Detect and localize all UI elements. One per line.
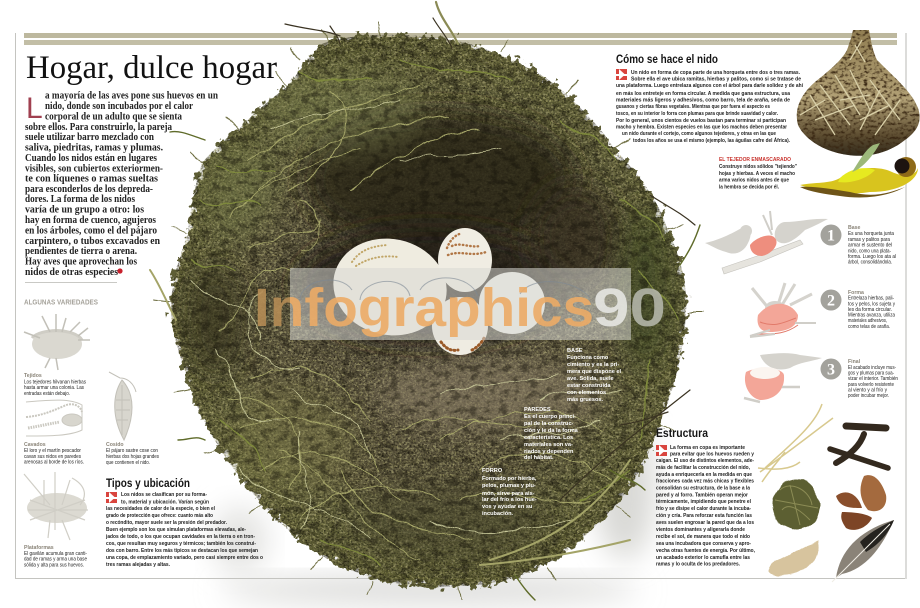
- variety: cosido: hierbas dos hojas grandes: [106, 454, 159, 460]
- section: como se hace el nido: todos los años se usa el mismo (ejemplo, las águilas cafre del África).: [633, 137, 790, 144]
- section: como se hace el nido: [616, 54, 803, 144]
- variety: tejidos: Tejidos: [24, 373, 42, 379]
- variety: cavados: Cavados: [24, 442, 46, 448]
- variety: plataformas: sólida y alta para sus huevos.: [24, 562, 84, 568]
- nest label: forro: pelos, plumas y plu-: [482, 483, 536, 489]
- eggs: [324, 228, 545, 355]
- callout: el tejedor enmascarado: hojas y hierbas. A veces el macho: [719, 171, 795, 177]
- section: tipos y ubicacion: una copa, de emplazamiento variado, pero casi siempre entre dos o: [106, 555, 263, 561]
- section: como se hace el nido: Un nido en forma de copa parte de una horqueta entre dos o tres ramas.: [631, 70, 800, 76]
- intro text: suele utilizar barro mezclado con: [25, 132, 154, 143]
- nest label: forro: món, sirve para ais-: [482, 491, 535, 497]
- step 1: ramas y palitos para: [848, 237, 890, 243]
- step 3: vizar el interior. También: [848, 376, 898, 382]
- step 2: Forma: [848, 290, 864, 296]
- nest label: base: [567, 348, 622, 403]
- materials: feather: [832, 520, 894, 582]
- section: tipos y ubicacion: grado de protección que ofrece: cuanto más alto: [106, 513, 213, 519]
- step 3: El acabado incluye mus-: [848, 365, 896, 371]
- section: estructura: aves suelen engrosar la pared que da a los: [656, 520, 754, 526]
- nest label: paredes: Es el cuerpo princi-: [524, 414, 576, 420]
- sticks beyond the rim: [150, 2, 700, 600]
- callout: el tejedor enmascarado: EL TEJEDOR ENMASCARADO: [719, 157, 792, 163]
- step 1: Base: [848, 225, 861, 231]
- nest body: [171, 35, 686, 587]
- materials: oak leaves: [836, 475, 886, 530]
- nest label: paredes: característica. Los: [524, 435, 573, 441]
- section: estructura: térmicamente, impidiendo que penetre el: [656, 499, 751, 505]
- section: estructura: ción y cría. Para reforzar esta función las: [656, 513, 752, 519]
- intro text: nidos de otras especies: [25, 267, 118, 278]
- number badge: [820, 290, 842, 310]
- variety: cavados: arenosas al borde de los ríos.: [24, 460, 84, 466]
- variety: cavados: cavan sus nidos en paredes: [24, 454, 81, 460]
- woven nest photo: [790, 25, 920, 197]
- step 2: materiales adhesivos,: [848, 318, 887, 324]
- nest label: base: más gruesos.: [567, 397, 604, 403]
- variety: tejidos: hasta armar una colonia. Las: [24, 385, 84, 391]
- section: estructura: Estructura: [656, 428, 709, 440]
- section: como se hace el nido: tosco, en su interior lo forra con plumas para que brinde suavidad y calor.: [616, 111, 778, 117]
- nest label: base: Funciona como: [567, 355, 609, 361]
- callout: el tejedor enmascarado: [719, 157, 797, 190]
- nest label: paredes: ción y le da la forma: [524, 428, 579, 434]
- section: estructura: ramas y lo oculta de los predadores.: [656, 562, 740, 568]
- number badge: 3: [827, 362, 835, 378]
- section: estructura: ayuda a enriquecerla en la medida en que: [656, 472, 752, 478]
- number badge: [820, 358, 842, 380]
- section: tipos y ubicacion: las necesidades de calor de la especie, o bien el: [106, 506, 215, 512]
- variety: tejidos: [24, 314, 90, 397]
- section: estructura: más de facilitar la construcción del nido,: [656, 465, 750, 471]
- section: como se hace el nido: una plataforma. Luego entrelaza algunos con el árbol para darle solidez y de ahí: [616, 83, 803, 89]
- number badge: 2: [827, 292, 835, 310]
- section: estructura: [656, 428, 755, 568]
- intro text: saliva, piedritas, ramas y plumas.: [25, 142, 163, 154]
- step 2: les da forma circular.: [848, 307, 892, 313]
- section: estructura: La forma en copa es importante: [670, 445, 745, 451]
- variedades heading: ALGUNAS VARIEDADES: [24, 300, 98, 306]
- intro text: dores. La forma de los nidos: [25, 194, 135, 205]
- materials: moss: [773, 479, 819, 531]
- section: como se hace el nido: macho y hembra. Existen especies en las que los machos deben presentar: [616, 124, 788, 130]
- section: como se hace el nido: materiales más ligeros y adhesivos, como barro, tela de araña, seda de: [616, 98, 790, 104]
- variety: cavados: [24, 400, 84, 466]
- materials: wool tuft: [768, 540, 819, 577]
- end mark: [117, 268, 123, 274]
- icon: woven colony: [24, 314, 90, 370]
- intro text: [25, 90, 218, 278]
- large egg: [324, 228, 456, 346]
- variety: plataformas: dad de ramas y arma una base: [24, 556, 87, 562]
- intro text: te con líquenes o ramas sueltas: [25, 174, 158, 184]
- section: estructura: consolidan su estructura, de la base a la: [656, 486, 751, 492]
- section: tipos y ubicacion: Buen ejemplo son los que simulan plataformas elevadas, ale-: [106, 527, 246, 533]
- nest label: paredes: PAREDES: [524, 407, 551, 413]
- section: como se hace el nido: Sobre ella el ave ubica ramitas, hierbas y palitos, como si se tratase de: [631, 76, 801, 82]
- strands: [156, 22, 702, 600]
- nest label: base: cimiento y es la pri-: [567, 362, 619, 368]
- section: tipos y ubicacion: Los nidos se clasifican por su forma-: [121, 492, 207, 498]
- intro text: en los árboles, como el del pájaro: [25, 226, 157, 236]
- section: estructura: vecha otras fuentes de energía. Por último,: [656, 548, 755, 554]
- section: estructura: fracciones cada vez más chicas y flexibles: [656, 478, 754, 484]
- upper small egg: [438, 228, 492, 292]
- section: como se hace el nido: un nido durante el cortejo, como algunos tejedores, y otras en las que: [622, 131, 776, 137]
- nest label: forro: [482, 468, 537, 517]
- intro text: nido, donde son incubados por el calor: [45, 101, 193, 112]
- section: tipos y ubicacion: cos, que resultan muy seguros y térmicos; también los construi-: [106, 541, 256, 547]
- variety: plataformas: Plataformas: [24, 545, 54, 551]
- section: estructura: un acabado exterior lo camufla entre las: [656, 555, 750, 561]
- header double rule: [24, 33, 897, 45]
- intro text: Hay aves que aprovechan los: [25, 256, 137, 268]
- section: estructura: para evitar que los huevos rueden y: [670, 452, 755, 458]
- step 3: Final: [848, 359, 861, 365]
- variety: plataformas: [24, 472, 88, 568]
- section: estructura: caigan. El uso de distintos elementos, ade-: [656, 458, 754, 464]
- intro text: visibles, son cubiertos exteriormen-: [25, 164, 163, 174]
- illustration: birds with first strands: [705, 211, 828, 274]
- variety: cavados: El loro y el martín pescador: [24, 448, 81, 454]
- nest label: base: con elementos: [567, 390, 606, 396]
- section: tipos y ubicacion: dos con barro. Entre los más típicos se destacan los que semejan: [106, 548, 258, 554]
- step 2: como telas de araña.: [848, 324, 890, 330]
- title: Hogar, dulce hogar: [26, 50, 277, 86]
- nest label: base: BASE: [567, 348, 583, 354]
- drop cap: L: [26, 92, 43, 125]
- nest label: base: estar construida: [567, 383, 611, 389]
- step 1: armar el sustento del: [848, 242, 892, 248]
- nest label: forro: incubación.: [482, 511, 514, 517]
- callout: el tejedor enmascarado: arma varios nidos antes de que: [719, 178, 789, 184]
- contrast texture: [171, 34, 686, 587]
- nest label: paredes: del hábitat.: [524, 455, 554, 461]
- section: estructura: pared y al forro. También operan mejor: [656, 492, 749, 498]
- nest label: paredes: materiales son va-: [524, 442, 573, 448]
- section: como se hace el nido: gusanos y ciertas fibras vegetales. Mientras que por fuera el aspecto es: [616, 104, 770, 110]
- watermark: [254, 268, 666, 340]
- icon: burrow: [26, 400, 82, 436]
- number badge: 1: [827, 228, 835, 244]
- icon: red arrow marker: [616, 69, 627, 80]
- nest label: forro: Formado por hierba,: [482, 476, 537, 482]
- intro text: hay en forma de cuenco, agujeros: [25, 215, 156, 226]
- intro text: sobre ellos. Para construirlo, la pareja: [25, 122, 173, 133]
- icon: sewn leaves: [109, 372, 136, 440]
- variety: cosido: El pájaro sastre cose con: [106, 448, 158, 454]
- illustration: bird weaving circular form: [750, 283, 816, 337]
- intro text: a mayoría de las aves pone sus huevos en un: [45, 90, 218, 102]
- callout: el tejedor enmascarado: la hembra se decida por él.: [719, 184, 779, 190]
- front small egg: [432, 297, 488, 355]
- step 3: [744, 353, 898, 402]
- step 1: forma. Luego los ata al: [848, 254, 896, 260]
- icon: red arrow marker: [656, 445, 667, 456]
- nest tonal areas: [305, 110, 575, 250]
- materials: straw: [758, 404, 833, 482]
- section: estructura: sea una incubadora que conserva y apro-: [656, 541, 751, 547]
- watermark: Infographics: [254, 278, 594, 338]
- nest label: forro: lar del frío a los hue-: [482, 497, 537, 503]
- nest label: forro: FORRO: [482, 468, 503, 474]
- step 2: Mientras avanza, utiliza: [848, 312, 895, 318]
- variety: cosido: Cosido: [106, 442, 124, 448]
- number badge: [820, 224, 842, 246]
- section: estructura: frío y se disipe el calor durante la incuba-: [656, 506, 751, 512]
- step 2: tos y pelos, los sujeta y: [848, 302, 895, 308]
- step 2: Entrelaza hierbas, pali-: [848, 296, 894, 302]
- texture: [171, 34, 686, 587]
- section: tipos y ubicacion: o recóndito, mayor suele ser la presión del predador.: [106, 520, 227, 526]
- nest label: paredes: pal de la construc-: [524, 421, 574, 427]
- step 3: para volverlo resistente: [848, 382, 894, 388]
- section: estructura: vientos dominantes y aligerarla donde: [656, 527, 745, 533]
- nest photograph: [150, 2, 710, 608]
- illustration: finished cup with bird: [744, 353, 822, 402]
- intro text: Cuando los nidos están en lugares: [25, 153, 157, 164]
- icon: red arrow marker: [106, 492, 117, 503]
- step 1: [705, 211, 896, 274]
- step 1: Es una horqueta junta: [848, 231, 894, 237]
- variety: cosido: que contienen el nido.: [106, 460, 150, 466]
- step 3: poder incubar mejor.: [848, 393, 889, 399]
- intro text: para esconderlos de los depreda-: [25, 184, 153, 195]
- intro text: carpintero, o tubos excavados en: [25, 236, 160, 247]
- variety: cosido: [106, 372, 159, 466]
- step 3: gos y plumas para sua-: [848, 370, 894, 376]
- icon: stick platform: [24, 472, 88, 540]
- section: como se hace el nido: en más los entreteje en forma circular. A medida que gana estructura, usa: [616, 91, 791, 97]
- intro text: pendientes de tierra o arena.: [25, 246, 137, 257]
- nest label: forro: vos y ayudar en su: [482, 504, 533, 510]
- materials: bark twigs: [830, 426, 888, 468]
- icon: masked weaver bird: [800, 143, 918, 197]
- watermark: 90: [593, 278, 666, 338]
- section: tipos y ubicacion: jados de todo, o los que ocupan cavidades en la tierra o en tron-: [105, 534, 255, 540]
- step 2: [750, 283, 895, 337]
- variety: tejidos: entradas están debajo.: [24, 391, 70, 397]
- nest label: paredes: [524, 407, 579, 461]
- variety: plataformas: El gavilán acumula gran canti-: [24, 551, 87, 557]
- step 1: nido, como una plata-: [848, 248, 891, 254]
- callout: el tejedor enmascarado: Construye nidos sólidos "tejiendo": [719, 164, 797, 170]
- nest label: paredes: riados y dependen: [524, 449, 574, 455]
- section: como se hace el nido: Cómo se hace el nido: [616, 54, 718, 66]
- step 3: al viento y al frío y: [848, 388, 887, 394]
- variety: tejidos: Los tejedores hilvanan hierbas: [24, 380, 86, 386]
- step 1: árbol, consolidándola.: [848, 260, 892, 266]
- section: tipos y ubicacion: tres ramas alejadas y altas.: [106, 562, 170, 568]
- section: estructura: recibe el sol, de manera que todo el nido: [656, 534, 751, 540]
- section: tipos y ubicacion: [105, 478, 263, 568]
- background shadow under the nest: [212, 420, 655, 604]
- nest label: base: mera que dispone el: [567, 369, 622, 375]
- intro text: varía de un grupo a otro: los: [25, 204, 144, 216]
- nest label: base: ave. Sólida, suele: [567, 376, 614, 382]
- section: tipos y ubicacion: to, material y ubicación. Varían según: [121, 500, 210, 506]
- intro text: corporal de un adulto que se sienta: [45, 112, 183, 122]
- right egg: [479, 272, 545, 334]
- section: tipos y ubicacion: Tipos y ubicación: [106, 478, 190, 490]
- section: como se hace el nido: Por lo general, unos cientos de vuelos bastan para terminar si participan: [616, 118, 787, 124]
